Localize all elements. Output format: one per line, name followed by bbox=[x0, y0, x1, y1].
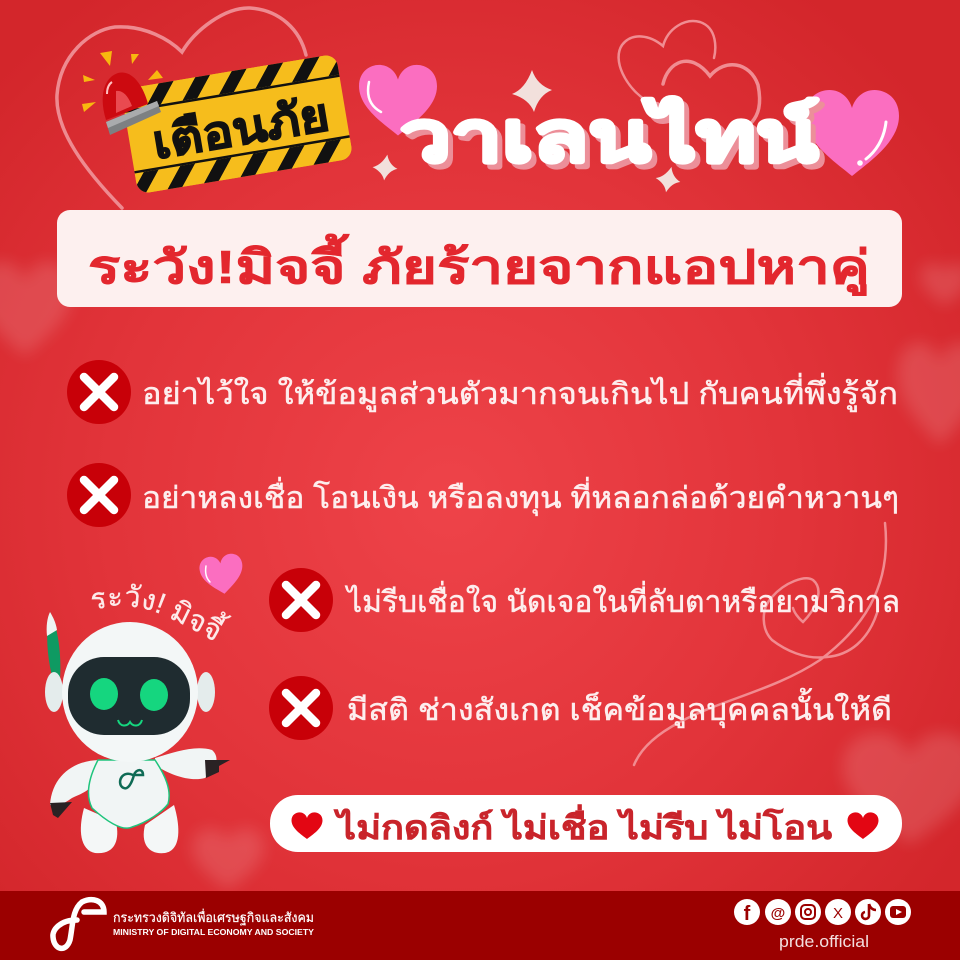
icon: pink heart left bbox=[359, 65, 437, 135]
warning item 3 bbox=[269, 568, 900, 632]
hazard stripes bbox=[121, 54, 353, 194]
warning item 1: อย่าไว้ใจ ให้ข้อมูลส่วนตัวมากจนเกินไป กับคนที่พึ่งรู้จัก bbox=[142, 373, 898, 412]
warning item 2: อย่าหลงเชื่อ โอนเงิน หรือลงทุน ที่หลอกล่อด้วยคำหวานๆ bbox=[142, 477, 899, 517]
icon: pink heart right bbox=[805, 90, 899, 176]
large heart outline bbox=[57, 8, 306, 208]
title: วาเลนไทน์ bbox=[400, 96, 819, 176]
warning item 3: ไม่รีบเชื่อใจ นัดเจอในที่ลับตาหรือยามวิกาล bbox=[345, 581, 900, 619]
sign text: เตือนภัย bbox=[149, 88, 333, 169]
ministry name: MINISTRY OF DIGITAL ECONOMY AND SOCIETY bbox=[113, 928, 315, 937]
warning item 2 bbox=[67, 463, 899, 527]
icon: siren bbox=[82, 51, 163, 135]
warning sign bbox=[121, 54, 353, 194]
blurred background hearts bbox=[0, 262, 960, 890]
robot speech text: ระวัง! มิจจี้ bbox=[92, 584, 232, 640]
account name: prde.official bbox=[779, 932, 869, 951]
social icons: X bbox=[833, 905, 843, 922]
banner bbox=[57, 210, 902, 307]
double heart outlines bbox=[619, 21, 760, 122]
warning item 4: มีสติ ช่างสังเกต เช็คข้อมูลบุคคลนั้นให้ดี bbox=[347, 688, 892, 729]
bottom pill bbox=[270, 795, 902, 852]
warning item 4 bbox=[269, 676, 892, 740]
swirl heart line bbox=[634, 523, 886, 765]
pill text: ไม่กดลิงก์ ไม่เชื่อ ไม่รีบ ไม่โอน bbox=[334, 804, 833, 846]
title bbox=[400, 96, 824, 181]
social icons: f bbox=[744, 903, 751, 925]
warning item 1 bbox=[67, 360, 898, 424]
ministry name bbox=[113, 909, 315, 937]
footer bar bbox=[0, 891, 960, 960]
icon: small heart bbox=[198, 552, 246, 597]
social icons bbox=[734, 899, 911, 925]
social icons: @ bbox=[771, 905, 785, 922]
ministry name: กระทรวงดิจิทัลเพื่อเศรษฐกิจและสังคม bbox=[113, 909, 314, 926]
robot mascot bbox=[45, 554, 242, 854]
banner text: ระวัง!มิจจี้ ภัยร้ายจากแอปหาคู่ bbox=[88, 233, 870, 296]
ministry logo bbox=[53, 900, 104, 948]
title: วาเลนไทน์ bbox=[405, 101, 824, 181]
sparkles bbox=[371, 70, 684, 195]
